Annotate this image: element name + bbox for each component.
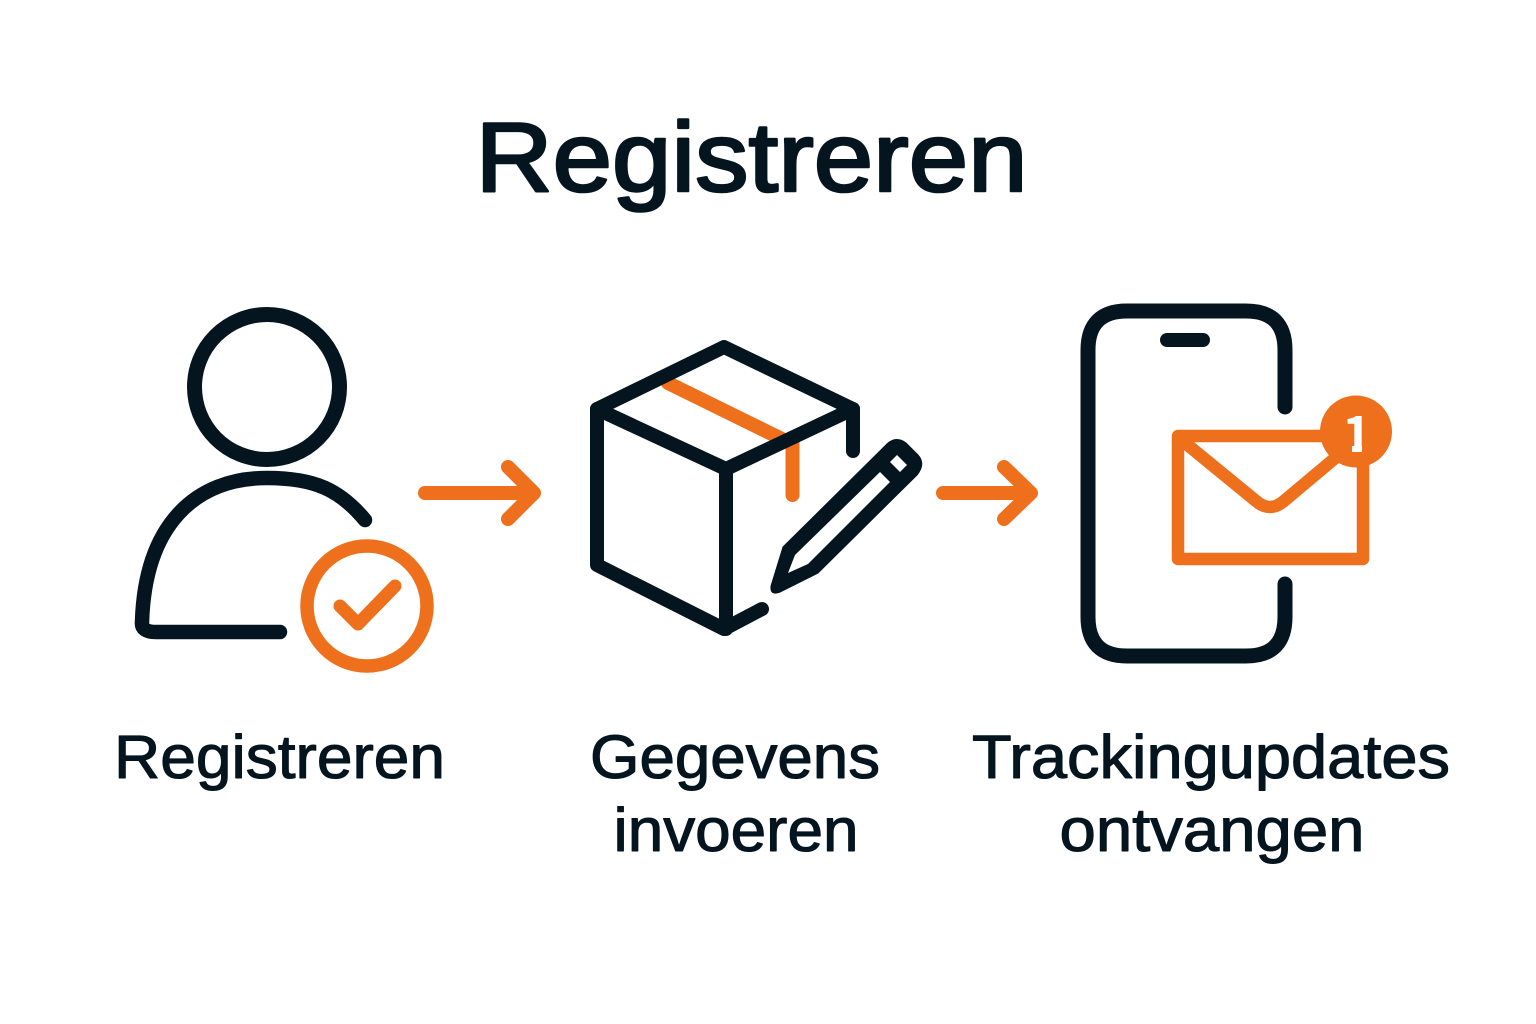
arrow 2	[943, 467, 1031, 519]
label: step 3: ontvangen	[1060, 796, 1364, 864]
label: step 2: invoeren	[614, 796, 858, 864]
icon: phone with envelope notification	[1088, 311, 1392, 656]
label: step 2: Gegevens	[590, 723, 880, 791]
label: step 1: Registreren	[114, 723, 445, 791]
icon: person with check badge	[142, 314, 427, 666]
badge number: 1	[1342, 395, 1372, 467]
label: step 2	[590, 723, 880, 864]
title: Registreren	[476, 102, 1028, 212]
arrow 1	[425, 467, 534, 519]
label: step 3	[972, 723, 1450, 864]
label: step 3: Trackingupdates	[972, 723, 1450, 791]
icon: box with pencil	[597, 347, 922, 629]
